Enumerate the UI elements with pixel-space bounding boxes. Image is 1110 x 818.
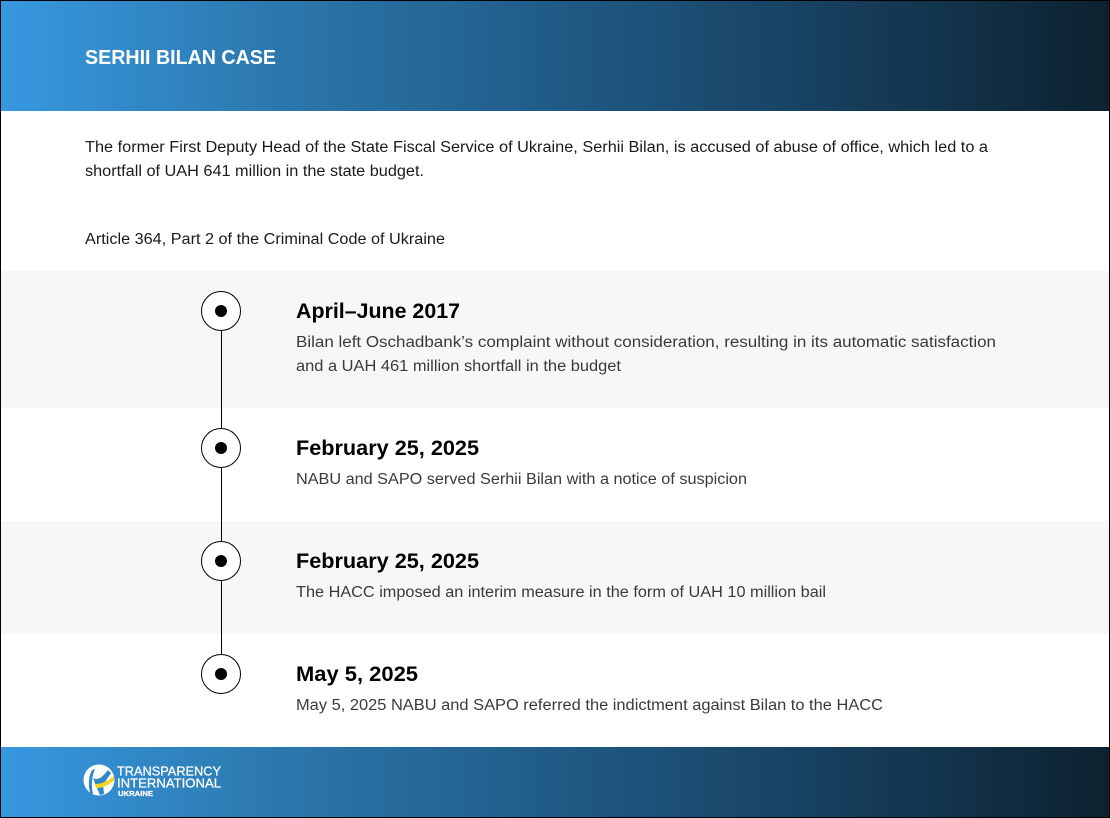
date heading 4: May 5, 2025 bbox=[296, 663, 418, 686]
logo wordmark bbox=[117, 764, 221, 798]
icon: logo globe bbox=[84, 764, 114, 796]
description 1 bbox=[296, 334, 996, 375]
footer banner bbox=[1, 747, 1109, 817]
intro text bbox=[85, 139, 988, 180]
timeline connector line bbox=[221, 311, 222, 674]
description 1: Bilan left Oschadbank’s complaint without consideration, resulting in its automatic satisfaction bbox=[296, 334, 996, 351]
timeline event 1 bbox=[202, 292, 996, 375]
logo wordmark: UKRAINE bbox=[118, 791, 153, 798]
timeline event 3 bbox=[202, 542, 826, 601]
logo wordmark: TRANSPARENCY bbox=[117, 764, 221, 778]
date heading 3: February 25, 2025 bbox=[296, 550, 479, 573]
icon: timeline marker 4 bbox=[202, 654, 240, 694]
logo wordmark: INTERNATIONAL bbox=[117, 776, 221, 790]
description 1: and a UAH 461 million shortfall in the budget bbox=[296, 358, 622, 375]
icon: timeline marker 2 bbox=[202, 428, 240, 468]
title: SERHII BILAN CASE bbox=[85, 47, 276, 69]
date heading 2: February 25, 2025 bbox=[296, 437, 479, 460]
intro text: shortfall of UAH 641 million in the state budget. bbox=[85, 163, 424, 180]
panel: timeline band 3 bbox=[1, 521, 1109, 634]
description 2: NABU and SAPO served Serhii Bilan with a notice of suspicion bbox=[296, 471, 747, 488]
timeline event 4 bbox=[202, 654, 883, 714]
intro text: The former First Deputy Head of the State Fiscal Service of Ukraine, Serhii Bilan, is accused of abuse of office, which led to a bbox=[85, 139, 988, 156]
panel: timeline band 1 bbox=[1, 271, 1109, 408]
header banner bbox=[1, 1, 1109, 111]
date heading 1: April–June 2017 bbox=[296, 300, 460, 323]
description 4: May 5, 2025 NABU and SAPO referred the indictment against Bilan to the HACC bbox=[296, 697, 883, 714]
description 3: The HACC imposed an interim measure in the form of UAH 10 million bail bbox=[296, 584, 826, 601]
icon: timeline marker 1 bbox=[202, 292, 240, 330]
icon: timeline marker 3 bbox=[202, 542, 240, 580]
timeline event 2 bbox=[202, 428, 747, 488]
legal article reference: Article 364, Part 2 of the Criminal Code of Ukraine bbox=[85, 231, 445, 248]
logo: Transparency International Ukraine bbox=[84, 764, 221, 798]
